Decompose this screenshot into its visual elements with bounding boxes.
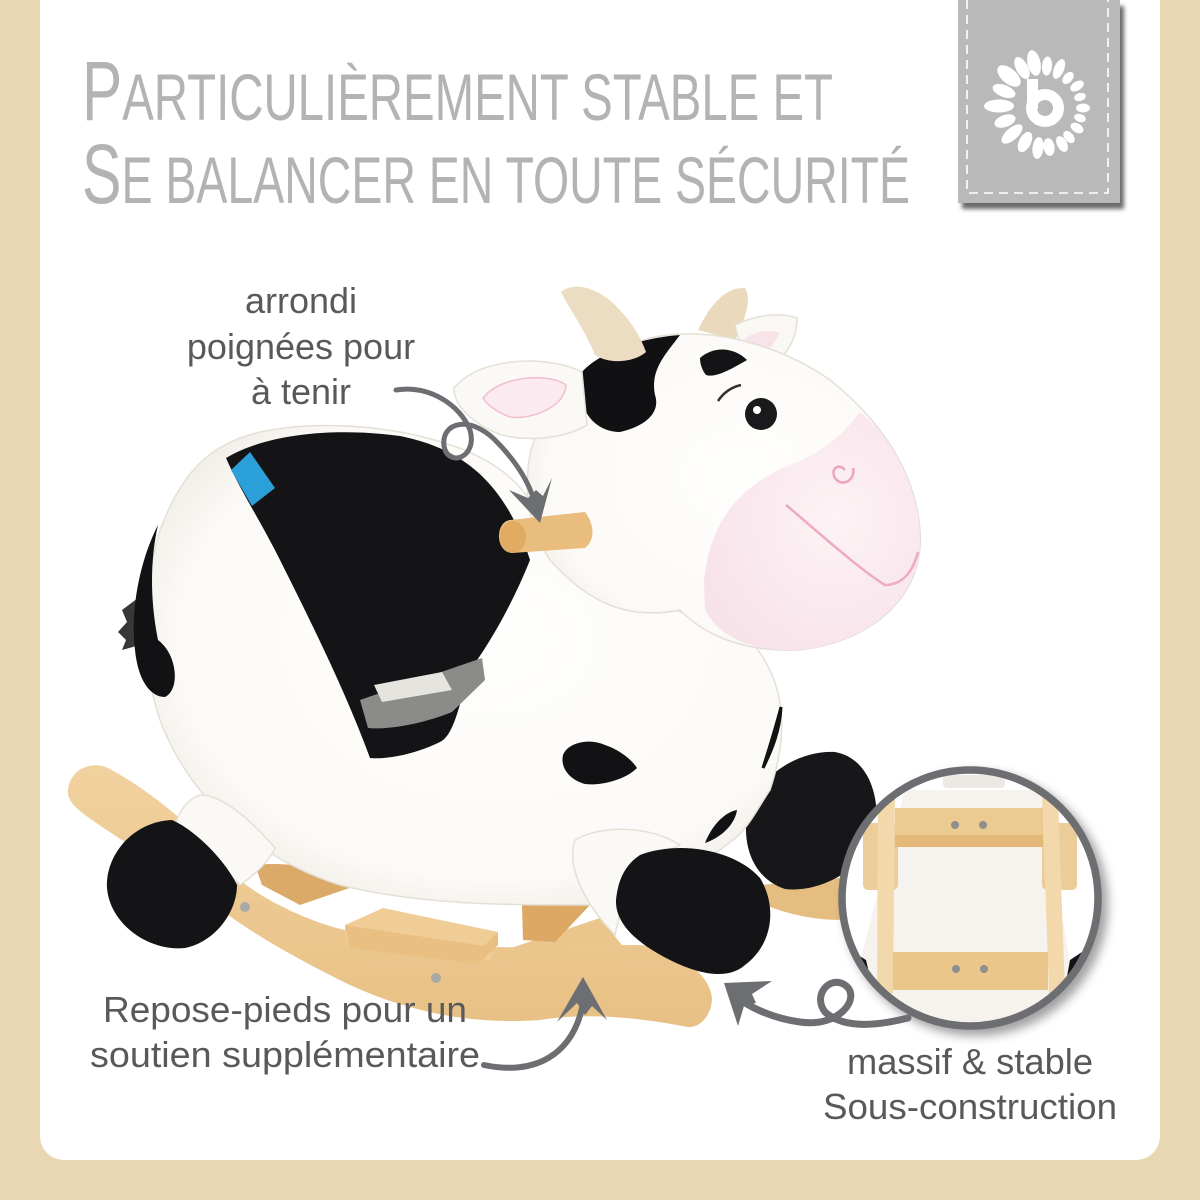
mouth [786,505,918,585]
cow body [134,426,782,905]
buckle [374,672,452,702]
screws [240,902,250,912]
muzzle [704,412,920,650]
tail [118,598,140,650]
label: foot rest [90,989,480,1075]
label: handles: à tenir [251,371,351,412]
rump black patch [134,525,175,697]
arrow: to base [724,981,908,1026]
front right leg and foot [573,829,770,974]
back rocker [255,864,358,905]
left ear [454,361,587,438]
label: foot rest: Repose-pieds pour un [103,989,467,1030]
nostril [833,467,853,483]
brand badge [958,0,1124,209]
black seat [226,432,530,758]
rocking horse base [68,765,842,1027]
title: PARTICULIÈREMENT STABLE ET [82,44,833,138]
head shape [527,334,920,650]
right ear [735,315,797,358]
label: base: massif & stable [847,1041,1093,1082]
front left leg and foot [107,795,275,948]
arrow: to foot rest [484,977,607,1068]
front rocker [68,765,712,1027]
black head patch [582,335,680,432]
foot rest [345,908,498,964]
icon: flower logo [984,49,1090,160]
label: base [823,1041,1117,1127]
title [82,44,910,221]
label: handles: poignées pour [187,326,415,367]
eye patch [700,350,747,376]
body spot [562,742,637,784]
seat support block [522,905,590,942]
blue label [231,452,275,506]
label: foot rest: soutien supplémentaire [90,1034,480,1075]
cow head [454,287,920,650]
label: base: Sous-construction [823,1086,1117,1127]
left horn [561,287,646,361]
foot: back right [746,752,877,889]
eye [745,398,777,430]
side spots [763,707,781,768]
wooden handle [499,512,592,553]
arrow: to handle [396,389,552,523]
right horn [698,288,748,340]
seat belt [360,658,485,728]
label: handles: arrondi [245,280,357,321]
inset circle: underside [842,770,1108,1036]
eyebrow [718,385,741,401]
